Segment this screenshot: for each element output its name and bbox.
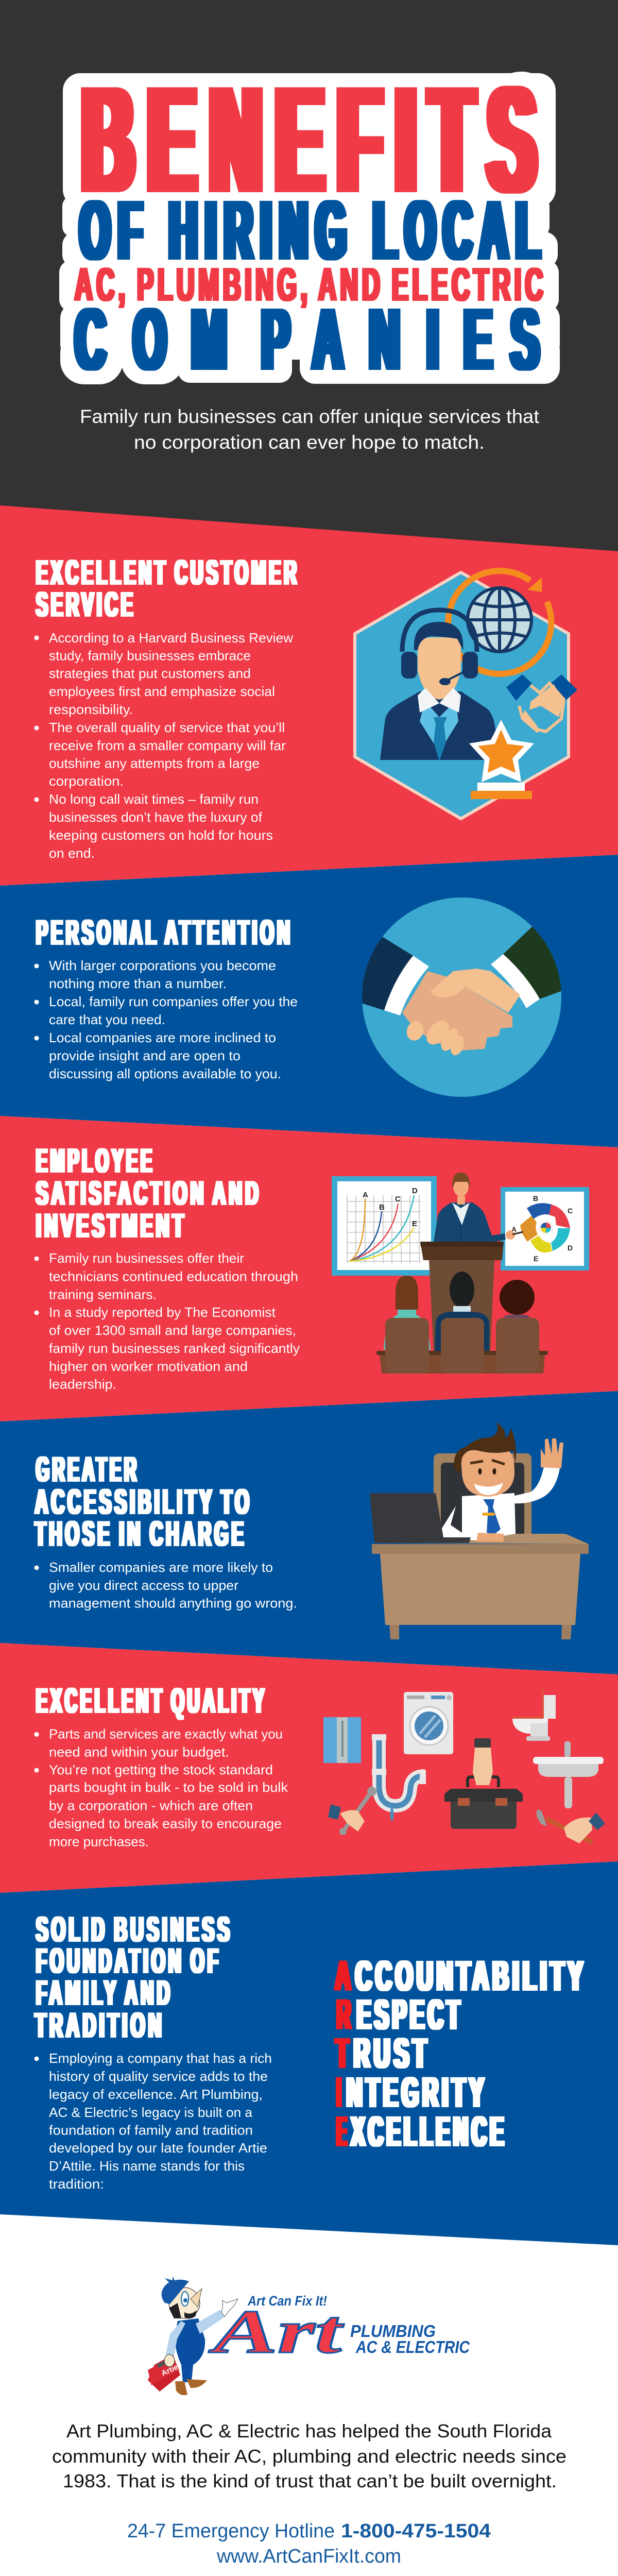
heading: [36, 553, 300, 624]
bullet list: [34, 1560, 297, 1611]
subtitle: no corporation can ever hope to match.: [134, 432, 485, 453]
bullet list: of over 1300 small and large companies,: [49, 1323, 296, 1338]
pipe with drip: [372, 1734, 426, 1821]
bullet list: technicians continued education through: [49, 1268, 298, 1284]
left line chart board: C: [395, 1195, 401, 1204]
bullet list: Parts and services are exactly what you: [49, 1726, 283, 1741]
bullet list: leadership.: [49, 1377, 116, 1392]
bullet list: nothing more than a number.: [49, 976, 227, 991]
bullet list: No long call wait times – family run: [49, 791, 259, 807]
closing paragraph: community with their AC, plumbing and electric needs since: [52, 2446, 566, 2467]
closing paragraph: [52, 2420, 566, 2492]
washing machine: [404, 1692, 453, 1754]
acronym ARTIE: A: [335, 1953, 351, 1999]
right donut chart board: A: [511, 1225, 517, 1233]
heading: SATISFACTION AND: [36, 1174, 262, 1212]
bullet list: give you direct access to upper: [49, 1578, 238, 1593]
heading: TRADITION: [35, 2006, 165, 2045]
bullet list: need and within your budget.: [49, 1744, 229, 1760]
panel: header: [0, 0, 618, 567]
icon: customer service agent hexagon: [355, 571, 577, 819]
icon: plumbing tools and appliances: [323, 1689, 605, 1843]
panel: employee satisfaction: [0, 1116, 618, 1421]
bullet list: You’re not getting the stock standard: [49, 1762, 273, 1777]
heading: GREATER: [36, 1450, 140, 1489]
audience: [376, 1272, 548, 1374]
heading: [36, 1142, 262, 1244]
mascot: Artie: [160, 2363, 180, 2378]
company name: [350, 2321, 470, 2357]
heading: SERVICE: [36, 585, 136, 624]
heading: [35, 1450, 252, 1553]
presenter at podium: [420, 1173, 523, 1352]
bullet list: more purchases.: [49, 1834, 149, 1850]
acronym ARTIE: NTEGRITY: [347, 2069, 488, 2116]
heading: SOLID BUSINESS: [36, 1910, 233, 1949]
bullet list: AC & Electric’s legacy is built on a: [49, 2105, 253, 2120]
left line chart board: E: [412, 1219, 417, 1228]
heading: THOSE IN CHARGE: [35, 1514, 247, 1553]
heading: FAMILY AND: [36, 1973, 173, 2012]
right donut chart board: [501, 1187, 589, 1270]
closing paragraph: 1983. That is the kind of trust that can’t be built overnight.: [63, 2470, 557, 2492]
acronym ARTIE: RUST: [354, 2030, 431, 2077]
bullet list: [34, 1726, 288, 1850]
subtitle: Family run businesses can offer unique services that: [80, 406, 540, 427]
left line chart board: D: [412, 1187, 418, 1195]
bullet list: Smaller companies are more likely to: [49, 1560, 273, 1575]
right donut chart board: E: [534, 1255, 538, 1263]
bullet list: According to a Harvard Business Review: [49, 630, 293, 646]
bullet list: [34, 1250, 300, 1392]
bullet list: The overall quality of service that you’ll: [49, 720, 285, 735]
subtitle: [80, 406, 540, 453]
bullet list: outshine any attempts from a large: [49, 756, 260, 771]
bullet list: [34, 958, 298, 1081]
acronym ARTIE: E: [337, 2108, 347, 2155]
panel: excellent quality: [0, 1643, 618, 1893]
hand with pipe wrench: [537, 1809, 605, 1843]
bullet list: Local, family run companies offer you the: [49, 994, 298, 1009]
title sticker: COMPANIES: [75, 291, 539, 388]
bullet list: tradition:: [49, 2176, 104, 2192]
heading: EMPLOYEE: [36, 1142, 155, 1179]
contact details: 1-800-475-1504: [341, 2520, 491, 2542]
icon: presentation scene: [332, 1173, 589, 1374]
bullet list: family run businesses ranked significantly: [49, 1341, 300, 1356]
bullet list: receive from a smaller company will far: [49, 738, 286, 753]
bullet list: study, family businesses embrace: [49, 648, 251, 664]
tagline: Art Can Fix It!: [247, 2293, 327, 2309]
closing paragraph: Art Plumbing, AC & Electric has helped the South Florida: [66, 2420, 552, 2442]
bullet list: discussing all options available to you.: [49, 1066, 281, 1081]
bullet list: by a corporation - which are often: [49, 1798, 253, 1814]
bullet list: designed to break easily to encourage: [49, 1816, 282, 1831]
bullet list: [34, 2050, 272, 2192]
right donut chart board: C: [568, 1207, 573, 1215]
left line chart board: B: [379, 1203, 385, 1212]
bullet list: D’Attile. His name stands for this: [49, 2158, 245, 2174]
bullet list: businesses don’t have the luxury of: [49, 809, 263, 825]
bullet list: higher on worker motivation and: [49, 1359, 248, 1374]
bullet list: training seminars.: [49, 1287, 157, 1302]
heading: FOUNDATION OF: [36, 1941, 221, 1980]
icon: handshake: [358, 897, 566, 1097]
left line chart board: A: [363, 1191, 368, 1199]
acronym ARTIE: ESPECT: [357, 1991, 464, 2038]
bullet list: employees first and emphasize social: [49, 684, 275, 699]
heading: EXCELLENT CUSTOMER: [36, 553, 300, 592]
panel: solid business foundation: [0, 1861, 618, 2245]
heading: [35, 1910, 233, 2045]
bullet list: responsibility.: [49, 702, 133, 717]
acronym ARTIE: [335, 1953, 587, 2155]
acronym ARTIE: T: [336, 2030, 349, 2077]
bullet list: strategies that put customers and: [49, 666, 251, 681]
sink: [533, 1741, 604, 1808]
mascot: [148, 2276, 238, 2395]
bullet list: legacy of excellence. Art Plumbing,: [49, 2087, 263, 2102]
company name: PLUMBING: [350, 2321, 436, 2341]
logo: Art Plumbing, AC & Electric: [148, 2276, 470, 2395]
company name: AC & ELECTRIC: [355, 2337, 470, 2357]
icon: manager at desk waving: [370, 1422, 589, 1639]
panel: excellent customer service: [0, 505, 618, 886]
bullet list: In a study reported by The Economist: [49, 1304, 276, 1320]
bullet list: management should anything go wrong.: [49, 1596, 297, 1611]
acronym ARTIE: I: [337, 2069, 341, 2116]
heading: INVESTMENT: [36, 1207, 187, 1244]
contact details: 24-7 Emergency Hotline: [127, 2520, 335, 2542]
bullet list: keeping customers on hold for hours: [49, 827, 273, 843]
bullet list: foundation of family and tradition: [49, 2123, 253, 2138]
title sticker: [59, 56, 560, 388]
bullet list: on end.: [49, 845, 95, 861]
hand with wrench: [328, 1787, 376, 1835]
heading: PERSONAL ATTENTION: [36, 913, 293, 952]
panel: greater accessibility: [0, 1391, 618, 1674]
right donut chart board: D: [568, 1244, 573, 1252]
hand with toolbox: [444, 1738, 523, 1829]
bullet list: With larger corporations you become: [49, 958, 276, 973]
wordmark Art: Art: [208, 2297, 345, 2366]
bullet list: history of quality service adds to the: [49, 2069, 268, 2084]
contact details: [127, 2520, 491, 2567]
bullet list: care that you need.: [49, 1012, 165, 1027]
left line chart board: [332, 1176, 437, 1276]
shower panel: [323, 1717, 361, 1763]
panel: excellent quality: EXCELLENT QUALITY: [36, 1681, 267, 1720]
bullet list: developed by our late founder Artie: [49, 2140, 267, 2156]
toilet: [512, 1689, 556, 1741]
bullet list: corporation.: [49, 773, 124, 789]
panel: personal attention: [0, 855, 618, 1147]
bullet list: Local companies are more inclined to: [49, 1030, 276, 1045]
bullet list: [34, 630, 293, 861]
contact details: www.ArtCanFixIt.com: [216, 2546, 401, 2567]
heading: ACCESSIBILITY TO: [35, 1482, 252, 1521]
bullet list: Employing a company that has a rich: [49, 2050, 272, 2066]
bullet list: Family run businesses offer their: [49, 1250, 244, 1266]
acronym ARTIE: R: [337, 1991, 351, 2038]
right donut chart board: B: [533, 1194, 538, 1202]
bullet list: provide insight and are open to: [49, 1048, 241, 1063]
bullet list: parts bought in bulk - to be sold in bulk: [49, 1780, 288, 1795]
